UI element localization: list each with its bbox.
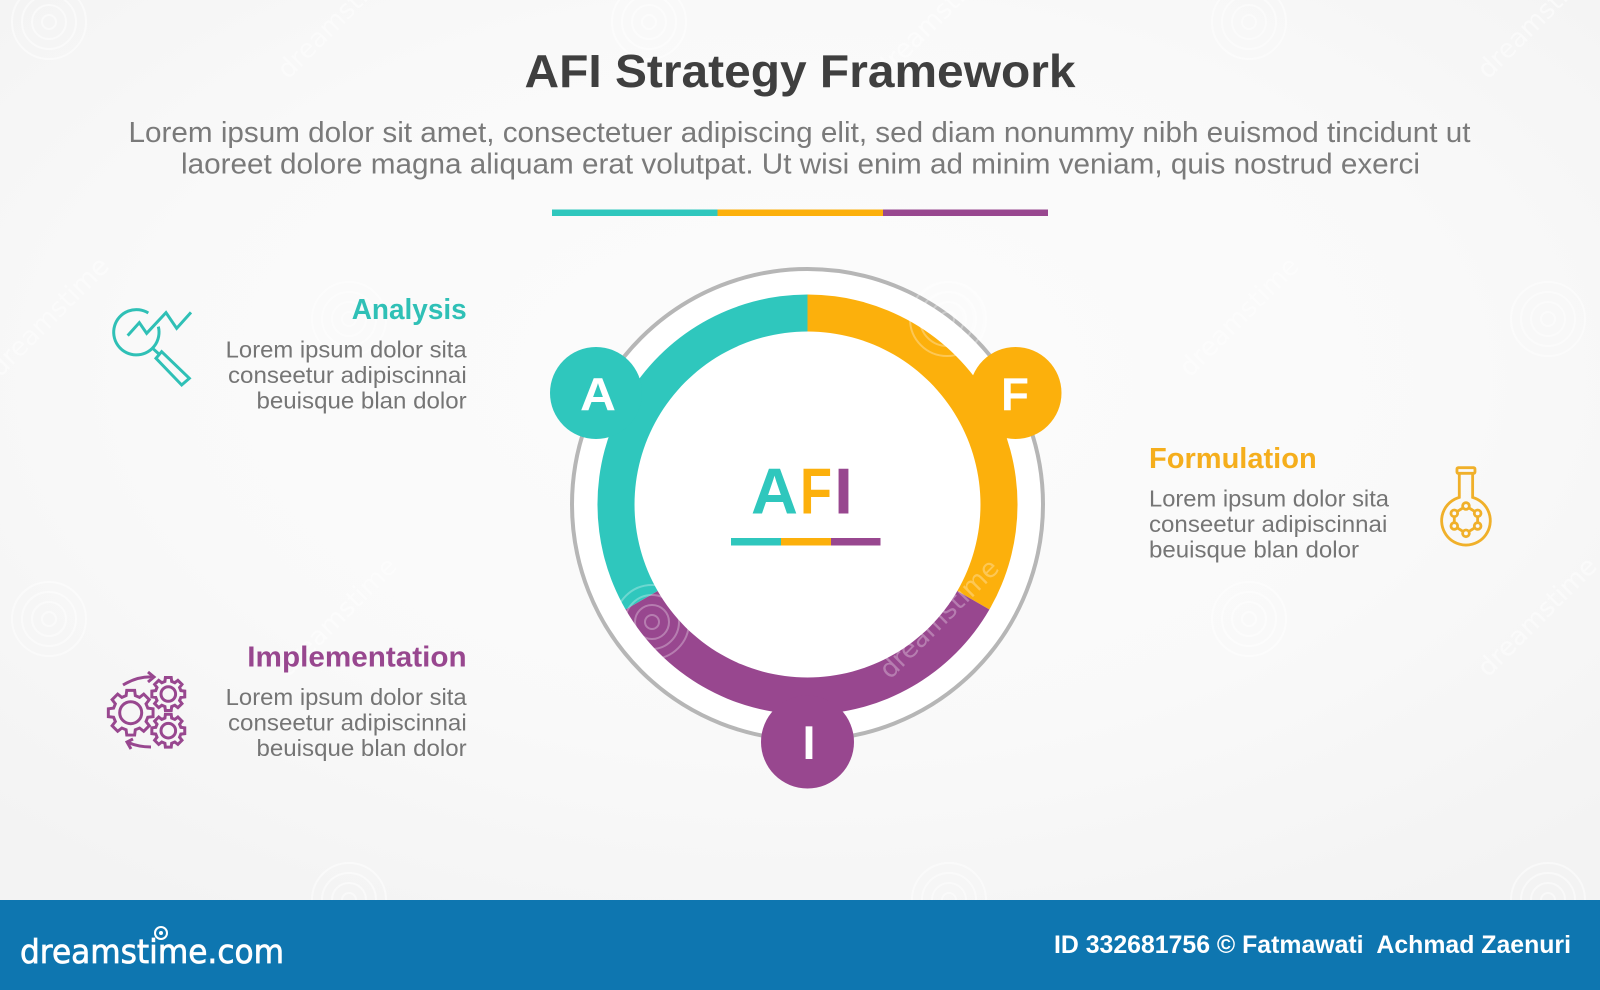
icon: gears with arrows [108, 672, 185, 749]
body text: implementation [226, 684, 467, 761]
icon: flask with molecule [1442, 468, 1490, 545]
centre label AFI: I [834, 454, 853, 528]
node A: A [580, 368, 616, 420]
heading: Implementation: Implementation [247, 642, 467, 674]
body text: implementation: Lorem ipsum dolor sita [226, 684, 467, 710]
centre label AFI: F [800, 454, 832, 528]
tricolor divider bar [552, 210, 1048, 216]
footer bar [0, 900, 1600, 990]
centre label AFI [751, 454, 853, 528]
subtitle text block: laoreet dolore magna aliquam erat volutpat. Ut wisi enim ad minim veniam, quis nostrud exerci [181, 148, 1420, 180]
body text: analysis: Lorem ipsum dolor sita [226, 336, 467, 362]
footer credit: ID 332681756 © Fatmawati Achmad Zaenuri [1054, 931, 1571, 959]
centre underline [731, 538, 880, 546]
body text: implementation: conseetur adipiscinnai [228, 710, 467, 736]
title: AFI Strategy Framework [524, 45, 1076, 97]
panel: analysis [114, 294, 467, 414]
footer logo: dreamstime.com [20, 932, 284, 971]
node F [970, 347, 1062, 439]
ring segment: implementation [626, 591, 989, 715]
body text: formulation [1149, 486, 1389, 563]
body text: analysis [226, 336, 467, 414]
subtitle text block [128, 117, 1471, 180]
heading: Formulation: Formulation [1149, 443, 1317, 475]
body text: analysis: conseetur adipiscinnai [228, 362, 467, 388]
body text: formulation: beuisque blan dolor [1149, 537, 1359, 563]
watermark over ring: dreamstime [874, 553, 1005, 685]
panel: implementation [108, 642, 467, 761]
body text: implementation: beuisque blan dolor [256, 735, 467, 761]
watermark over ring [615, 282, 1005, 685]
heading: Analysis: Analysis [352, 294, 467, 326]
outer grey ring [572, 269, 1043, 740]
ring segment: analysis [597, 294, 808, 610]
watermark swirls: dreamstime [272, 551, 403, 683]
node I [761, 696, 854, 788]
icon: magnifier with chart [114, 310, 191, 385]
body text: analysis: beuisque blan dolor [256, 388, 467, 414]
watermark swirls: dreamstime [1174, 251, 1305, 383]
central circular diagram [550, 269, 1062, 788]
panel: formulation [1149, 443, 1490, 563]
node A [550, 347, 642, 439]
body text: formulation: conseetur adipiscinnai [1149, 511, 1387, 537]
centre label AFI: A [751, 454, 798, 528]
subtitle text block: Lorem ipsum dolor sit amet, consectetuer adipiscing elit, sed diam nonummy nibh euismod tincidunt ut [128, 117, 1471, 149]
node F: F [1001, 368, 1029, 420]
node I: I [802, 716, 816, 769]
watermark swirls: dreamstime [1472, 551, 1600, 683]
ring segment: formulation [808, 294, 1018, 610]
body text: formulation: Lorem ipsum dolor sita [1149, 486, 1389, 512]
